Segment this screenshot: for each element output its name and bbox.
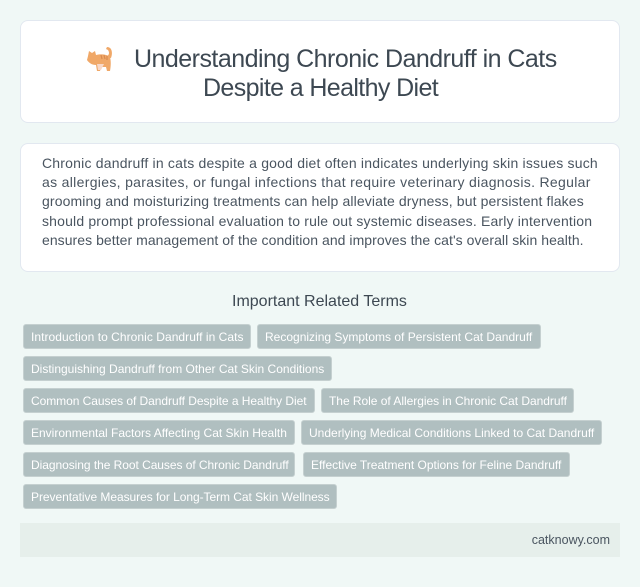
tag: The Role of Allergies in Chronic Cat Dandruff (329, 394, 567, 408)
footer source: catknowy.com (532, 533, 610, 547)
tag (301, 420, 602, 445)
title: Understanding Chronic Dandruff in Cats (134, 45, 557, 73)
tag (23, 420, 295, 445)
tag (23, 356, 332, 381)
tag (321, 388, 574, 413)
description text: grooming and moisturizing treatments can help alleviate dryness, but persistent flakes (42, 193, 584, 209)
tag: Environmental Factors Affecting Cat Skin Health (31, 426, 287, 440)
tag: Effective Treatment Options for Feline Dandruff (311, 458, 561, 472)
tag: Underlying Medical Conditions Linked to Cat Dandruff (309, 426, 594, 440)
tag: Diagnosing the Root Causes of Chronic Dandruff (31, 458, 289, 472)
tag: Recognizing Symptoms of Persistent Cat Dandruff (265, 330, 532, 344)
description text (42, 155, 598, 248)
description text: Chronic dandruff in cats despite a good diet often indicates underlying skin issues such (42, 155, 598, 171)
description text: should prompt professional evaluation to rule out systemic diseases. Early intervention (42, 213, 592, 229)
tag (303, 452, 570, 477)
tag: Introduction to Chronic Dandruff in Cats (31, 330, 244, 344)
tag (23, 452, 295, 477)
tag (23, 388, 315, 413)
section heading: Important Related Terms (232, 293, 407, 310)
tag: Preventative Measures for Long-Term Cat Skin Wellness (31, 490, 330, 504)
related term tags (23, 324, 602, 509)
tag: Common Causes of Dandruff Despite a Healthy Diet (31, 394, 307, 408)
description card (20, 143, 620, 272)
tag (23, 484, 337, 509)
description text: ensures better management of the condition and improves the cat's overall skin health. (42, 232, 584, 248)
footer bar (20, 523, 620, 557)
icon: cat (87, 47, 112, 71)
tag: Distinguishing Dandruff from Other Cat Skin Conditions (31, 362, 324, 376)
title (134, 45, 557, 102)
tag (257, 324, 541, 349)
description text: as allergies, parasites, or fungal infections that require veterinary diagnosis. Regular (42, 174, 591, 190)
tag (23, 324, 251, 349)
title: Despite a Healthy Diet (203, 74, 438, 102)
title card (20, 20, 620, 123)
